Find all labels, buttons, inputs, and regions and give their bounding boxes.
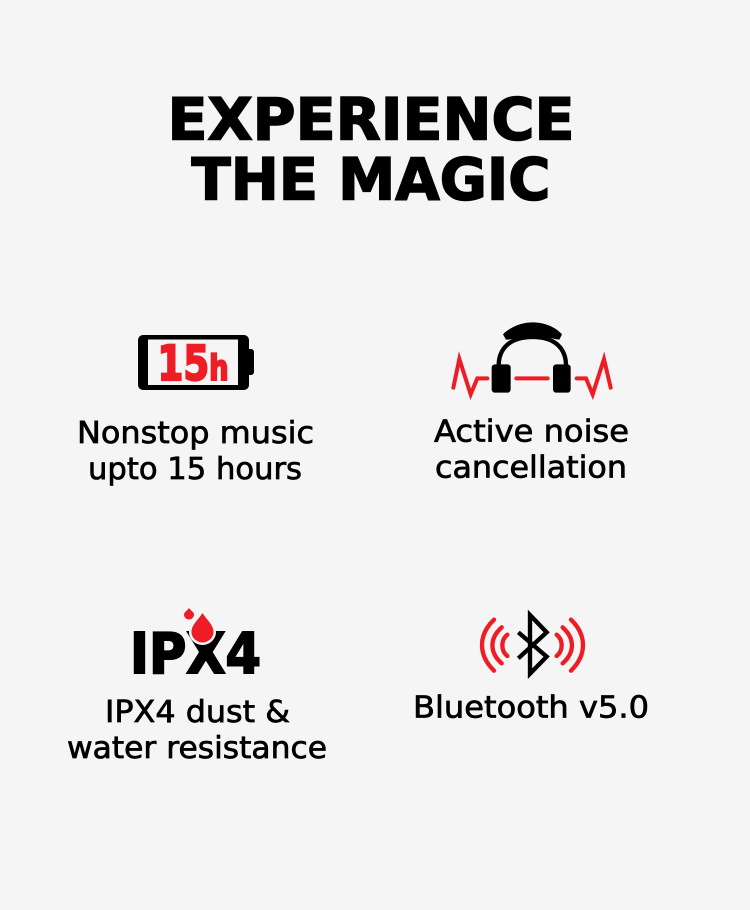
icon: IPX4 with water drops: IPX4 — [130, 622, 261, 687]
panel: noise cancellation feature — [434, 322, 629, 486]
panel: IPX4 feature — [67, 608, 327, 766]
text: IPX4 dust and water resistance: water resistance — [67, 731, 327, 766]
icon: battery 15 hours — [138, 335, 254, 392]
title — [168, 85, 574, 213]
text: bluetooth version: Bluetooth v5.0 — [413, 690, 649, 726]
text: IPX4 dust and water resistance: IPX4 dust & — [105, 695, 290, 730]
text: nonstop music — [77, 416, 314, 487]
text: active noise cancellation: Active noise — [434, 414, 629, 450]
title: EXPERIENCE — [168, 85, 574, 153]
panel: bluetooth feature — [413, 615, 649, 726]
text: nonstop music: upto 15 hours — [88, 452, 302, 487]
text: IPX4 dust and water resistance — [67, 695, 327, 766]
icon: battery 15 hours: 15h — [158, 336, 228, 392]
text: nonstop music: Nonstop music — [77, 416, 314, 451]
icon: bluetooth with signal arcs — [482, 615, 583, 674]
icon: headphones with sound waves — [453, 322, 611, 394]
text: active noise cancellation: cancellation — [435, 450, 627, 486]
title: THE MAGIC — [192, 145, 550, 213]
panel: battery feature — [77, 335, 314, 487]
text: active noise cancellation — [434, 414, 629, 486]
